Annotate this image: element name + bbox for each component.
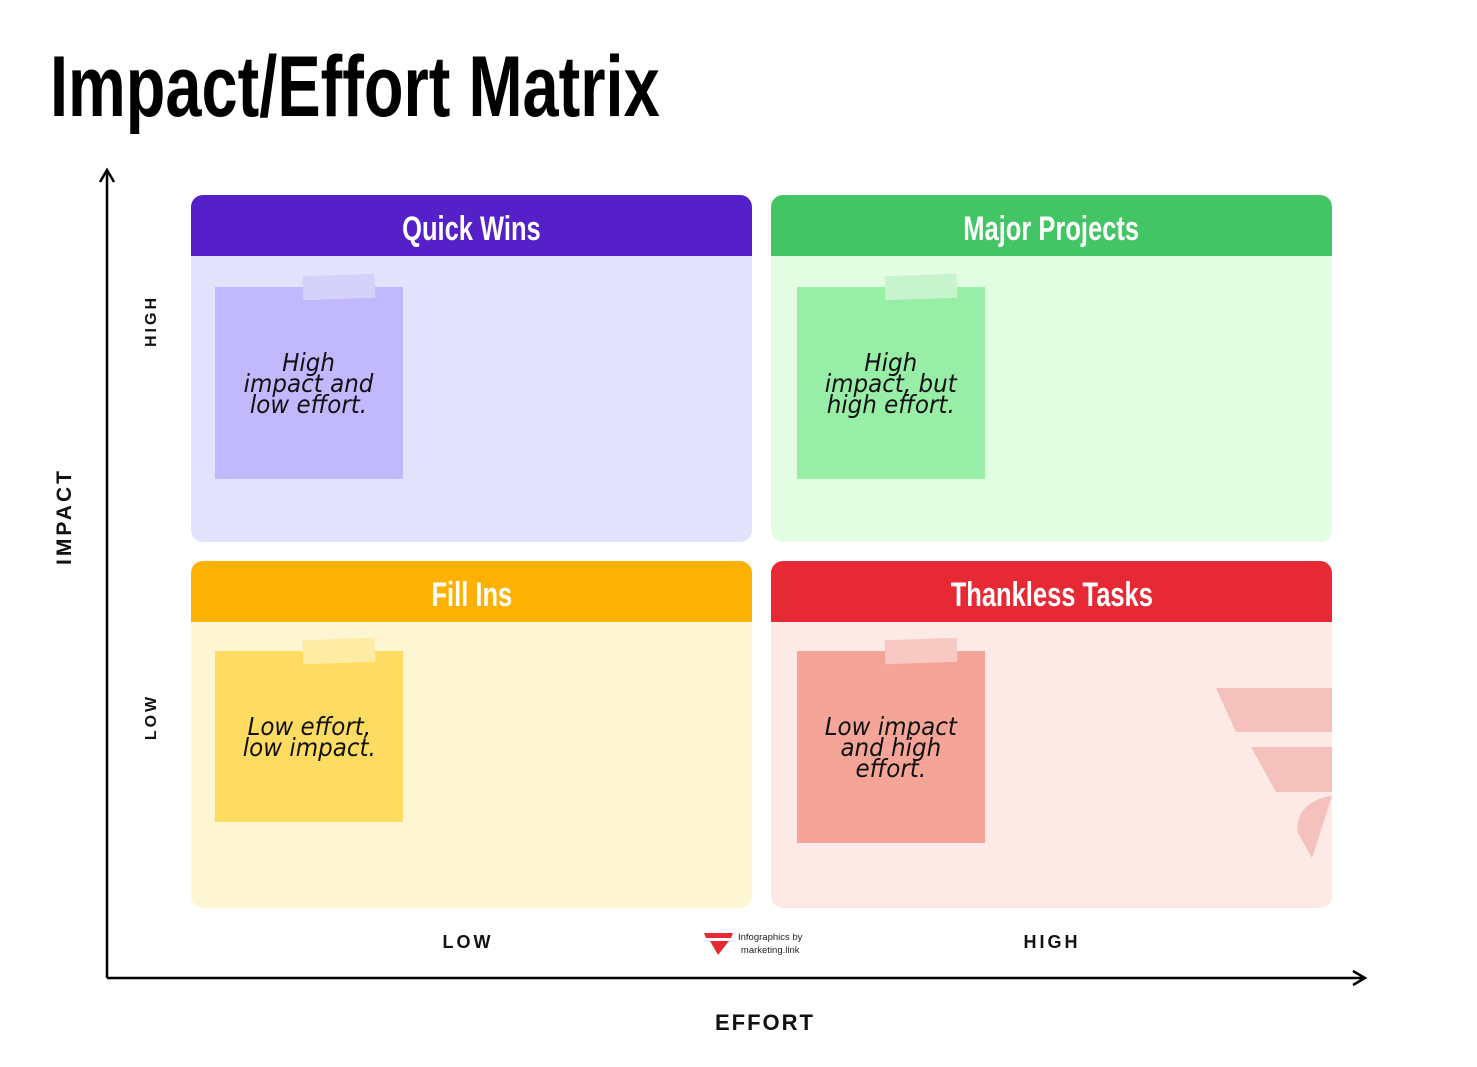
watermark logo [1216, 688, 1332, 858]
axis label: effort: EFFORT [715, 1010, 815, 1035]
heading [191, 561, 752, 622]
sticky note: High [283, 348, 335, 376]
credit logo [704, 932, 802, 956]
axis label: high impact: HIGH [143, 295, 160, 347]
panel: fill ins [191, 561, 752, 908]
sticky note: Low effort, [247, 712, 371, 740]
sticky note [215, 651, 403, 822]
sticky note: low effort. [250, 390, 368, 418]
heading: Fill Ins [431, 576, 512, 614]
sticky note: low impact. [242, 732, 376, 762]
credit logo: marketing.link [741, 945, 800, 956]
sticky note [215, 287, 403, 479]
heading: Quick Wins [402, 210, 541, 248]
tape [885, 638, 957, 664]
tape [303, 274, 375, 300]
heading [191, 195, 752, 256]
panel: quick wins [191, 195, 752, 542]
heading: Major Projects [964, 210, 1139, 248]
axis label: low effort: LOW [442, 932, 494, 952]
panel: major projects [771, 195, 1332, 542]
axis label: impact: IMPACT [53, 468, 76, 565]
heading [771, 561, 1332, 622]
sticky note [797, 651, 985, 843]
panel: thankless tasks [771, 561, 1332, 908]
sticky note: Low impact [825, 712, 957, 740]
sticky note [797, 287, 985, 479]
credit logo: Infographics by [738, 932, 802, 943]
tape [303, 638, 375, 664]
title: Impact/Effort Matrix [50, 39, 660, 135]
sticky note: effort. [856, 754, 926, 782]
axis label: low impact: LOW [143, 694, 160, 740]
tape [885, 274, 957, 300]
sticky note: and high [841, 732, 941, 762]
sticky note: impact, but [825, 368, 957, 398]
heading [771, 195, 1332, 256]
axis label: high effort: HIGH [1024, 932, 1080, 952]
heading: Thankless Tasks [950, 576, 1153, 614]
sticky note: high effort. [827, 390, 955, 418]
sticky note: High [865, 348, 917, 376]
sticky note: impact and [244, 368, 374, 398]
